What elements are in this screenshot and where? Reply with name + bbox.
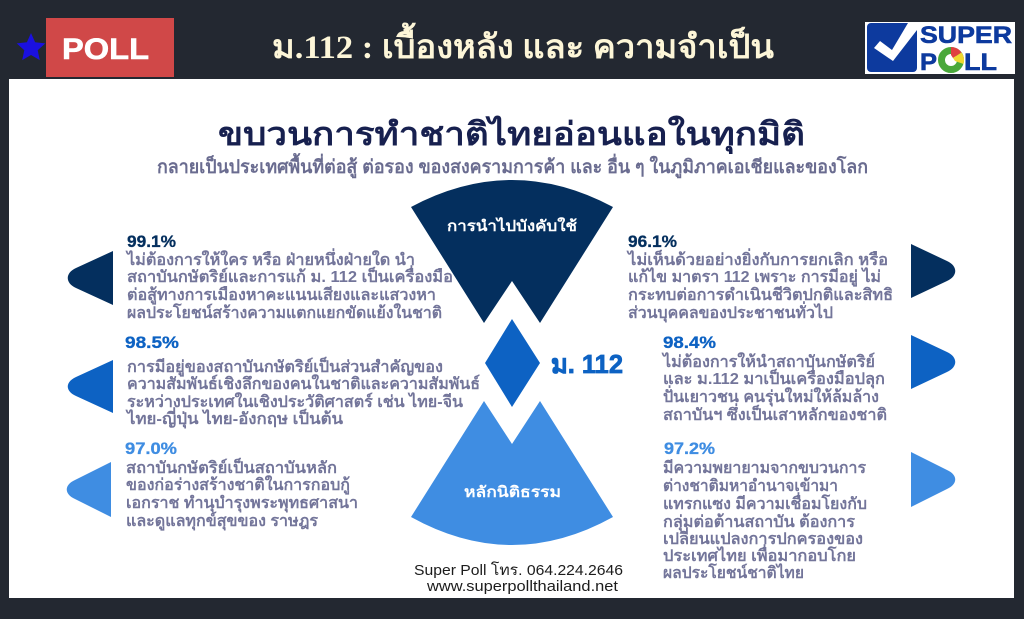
top fan: enforcement: การนำไปบังคับใช้ — [447, 216, 577, 235]
footer contact: www.superpollthailand.net — [426, 578, 619, 595]
left item 99.1%: ผลประโยชน์สร้างความแตกแยกขัดแย้งในชาติ — [127, 302, 442, 322]
Super Poll logo — [865, 22, 1015, 76]
right item 98.4% — [661, 334, 955, 424]
top fan: enforcement — [411, 180, 613, 323]
left item 98.5%: ความสัมพันธ์เชิงลึกของคนในชาติและความสัมพันธ์ — [127, 374, 480, 393]
left item 97.0%: สถาบันกษัตริย์เป็นสถาบันหลัก — [126, 456, 337, 477]
left item 99.1%: สถาบันกษัตริย์และการแก้ ม. 112 เป็นเครื่องมือ — [127, 265, 453, 286]
left item 98.5%: 98.5% — [125, 334, 179, 352]
right item 97.2% — [663, 440, 955, 582]
Super Poll logo: P — [920, 49, 937, 76]
right item 98.4%: สถาบันฯ ซึ่งเป็นเสาหลักของชาติ — [663, 403, 887, 424]
POLL badge: POLL — [62, 33, 149, 66]
left item 99.1% — [68, 233, 453, 322]
right item 96.1%: ไม่เห็นด้วยอย่างยิ่งกับการยกเลิก หรือ — [626, 248, 888, 269]
diamond — [485, 319, 540, 407]
subheading: กลายเป็นประเทศพื้นที่ต่อสู้ ต่อรอง ของสงครามการค้า และ อื่น ๆ ในภูมิภาคเอเชียและของโลก — [157, 153, 868, 179]
right item 96.1%: ส่วนบุคคลของประชาชนทั่วไป — [628, 301, 833, 323]
POLL badge — [46, 18, 174, 77]
left item 98.5%: ระหว่างประเทศในเชิงประวัติศาสตร์ เช่น ไทย-จีน — [127, 392, 463, 411]
right item 97.2%: ประเทศไทย เพื่อมากอบโกย — [663, 544, 856, 565]
left item 99.1%: ไม่ต้องการให้ใคร หรือ ฝ่ายหนึ่งฝ่ายใด นำ — [125, 248, 415, 269]
right item 97.2%: กลุ่มต่อต้านสถาบัน ต้องการ — [663, 513, 855, 532]
left item 98.5%: การมีอยู่ของสถาบันกษัตริย์เป็นส่วนสำคัญของ — [127, 355, 443, 378]
Super Poll logo: SUPER — [920, 22, 1012, 49]
left item 99.1%: ต่อสู้ทางการเมืองหาคะแนนเสียงและแสวงหา — [127, 285, 436, 306]
main heading: ขบวนการทำชาติไทยอ่อนแอในทุกมิติ — [218, 115, 805, 155]
right item 98.4%: ปั่นเยาวชน คนรุ่นใหม่ให้ล้มล้าง — [663, 385, 879, 407]
right item 97.2%: เปลี่ยนแปลงการปกครองของ — [663, 527, 863, 548]
right item 97.2%: ผลประโยชน์ชาติไทย — [663, 562, 804, 582]
footer contact — [414, 561, 623, 595]
header title: ม.112 : เบื้องหลัง และ ความจำเป็น — [272, 22, 774, 66]
left item 99.1%: 99.1% — [127, 233, 176, 251]
right item 98.4%: ไม่ต้องการให้นำสถาบันกษัตริย์ — [661, 352, 875, 371]
right item 97.2%: มีความพยายามจากขบวนการ — [663, 458, 866, 477]
left item 98.5% — [68, 334, 480, 429]
footer contact: Super Poll โทร. 064.224.2646 — [414, 561, 623, 579]
right item 97.2%: แทรกแซง มีความเชื่อมโยงกับ — [663, 492, 867, 513]
right item 98.4%: และ ม.112 มาเป็นเครื่องมือปลุก — [663, 367, 885, 389]
left item 97.0% — [67, 440, 358, 532]
icon: blue star — [17, 33, 45, 60]
left item 97.0%: และดูแลทุกข์สุขของ ราษฎร — [126, 511, 318, 532]
central diagram — [411, 180, 623, 545]
bottom fan: rule of law — [411, 401, 613, 545]
left item 97.0%: ของก่อร่างสร้างชาติในการกอบกู้ — [126, 475, 350, 496]
bottom fan: rule of law: หลักนิติธรรม — [464, 483, 561, 501]
right item 96.1%: 96.1% — [628, 233, 677, 251]
left item 97.0%: เอกราช ทำนุบำรุงพระพุทธศาสนา — [126, 494, 358, 513]
right item 97.2%: ต่างชาติมหาอำนาจเข้ามา — [663, 477, 838, 495]
Super Poll logo: LL — [964, 49, 997, 76]
right item 98.4%: 98.4% — [663, 334, 716, 352]
section 112 label: ม. 112 — [551, 349, 623, 379]
right item 97.2%: 97.2% — [664, 440, 715, 458]
right item 96.1% — [626, 233, 955, 323]
right item 96.1%: แก้ไข มาตรา 112 เพราะ การมีอยู่ ไม่ — [628, 267, 881, 288]
left item 98.5%: ไทย-ญี่ปุ่น ไทย-อังกฤษ เป็นต้น — [125, 407, 343, 429]
left item 97.0%: 97.0% — [125, 440, 177, 458]
right item 96.1%: กระทบต่อการดำเนินชีวิตปกติและสิทธิ — [628, 285, 893, 304]
